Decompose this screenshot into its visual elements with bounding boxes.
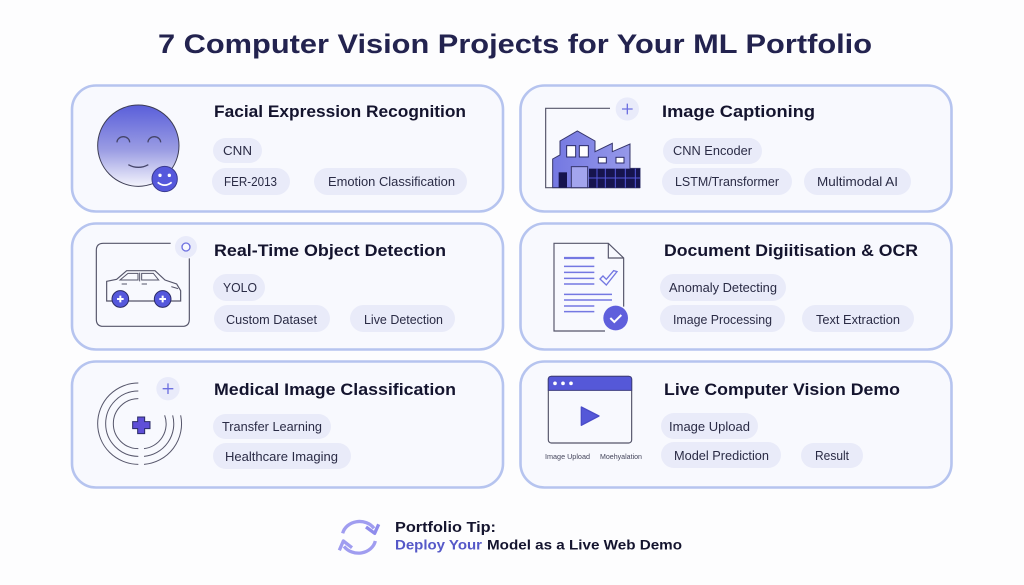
heading: image captioning: Image Captioning xyxy=(662,102,815,121)
tag: LSTM/Transformer xyxy=(662,168,792,195)
heading: medical image classification: Medical Image Classification xyxy=(214,380,456,399)
heading: facial expression recognition: Facial Expression Recognition xyxy=(214,102,466,121)
caption: moehyalation: Moehyalation xyxy=(600,452,642,461)
text: model as a live web demo: Model as a Live Web Demo xyxy=(487,538,682,552)
icon: car in detection frame xyxy=(96,236,197,326)
icon: browser window with play button xyxy=(548,376,632,443)
tag: Result: Result xyxy=(815,448,849,463)
tag: Custom Dataset xyxy=(214,305,330,332)
panel: live computer vision demo xyxy=(520,362,952,488)
tag: YOLO xyxy=(213,274,265,301)
tag: Anomaly Detecting xyxy=(660,274,786,301)
icon: refresh arrows xyxy=(339,521,379,553)
panel: facial expression recognition xyxy=(72,86,503,212)
tag: Transfer Learning: Transfer Learning xyxy=(222,419,322,434)
tag: Text Extraction: Text Extraction xyxy=(816,312,900,327)
icon: medical cross with scan rings xyxy=(98,377,182,464)
caption: image upload: Image Upload xyxy=(545,452,590,461)
tag: Text Extraction xyxy=(802,305,914,332)
tag: Transfer Learning xyxy=(213,414,331,439)
heading: live computer vision demo: Live Computer Vision Demo xyxy=(664,380,900,399)
text: portfolio tip heading: Portfolio Tip: xyxy=(395,520,496,536)
tag: Result xyxy=(801,443,863,468)
tag: CNN: CNN xyxy=(223,143,252,158)
tag: CNN xyxy=(213,138,262,163)
title: 7 Computer Vision Projects for Your ML Portfolio xyxy=(158,29,872,59)
tag: FER-2013 xyxy=(212,168,290,195)
panel: medical image classification xyxy=(72,362,503,488)
tag: Model Prediction: Model Prediction xyxy=(674,448,769,463)
heading: document digitisation and OCR: Document Digiitisation & OCR xyxy=(664,241,918,260)
tag: Image Processing: Image Processing xyxy=(673,312,772,327)
tag: Image Upload xyxy=(661,413,758,439)
text: deploy your: Deploy Your xyxy=(395,538,483,552)
icon: smiling face xyxy=(98,105,179,192)
tag: LSTM/Transformer: LSTM/Transformer xyxy=(675,174,780,189)
tag: CNN Encoder: CNN Encoder xyxy=(673,143,753,158)
tag: Healthcare Imaging xyxy=(213,443,351,469)
tag: Emotion Classification xyxy=(314,168,467,195)
tag: FER-2013: FER-2013 xyxy=(224,174,277,189)
tag: Model Prediction xyxy=(661,442,781,468)
tag: Live Detection xyxy=(350,305,455,332)
tag: Live Detection: Live Detection xyxy=(364,312,443,327)
tag: Emotion Classification: Emotion Classification xyxy=(328,174,455,189)
panel: real-time object detection xyxy=(72,224,503,350)
tag: Multimodal AI: Multimodal AI xyxy=(817,174,898,189)
tag: Image Processing xyxy=(660,305,785,332)
icon: factory image frame xyxy=(546,97,640,188)
tag: Anomaly Detecting: Anomaly Detecting xyxy=(669,280,777,295)
panel: image captioning xyxy=(520,86,952,212)
tag: Multimodal AI xyxy=(804,168,911,195)
tag: Image Upload: Image Upload xyxy=(669,419,750,434)
heading: real-time object detection: Real-Time Object Detection xyxy=(214,241,446,260)
callout: portfolio tip xyxy=(339,520,682,553)
tag: CNN Encoder xyxy=(663,138,762,164)
tag: Healthcare Imaging: Healthcare Imaging xyxy=(225,449,338,464)
tag: YOLO: YOLO xyxy=(223,280,257,295)
icon: document with checks xyxy=(554,243,628,331)
tag: Custom Dataset: Custom Dataset xyxy=(226,312,317,327)
panel: document digitisation and OCR xyxy=(520,224,952,350)
